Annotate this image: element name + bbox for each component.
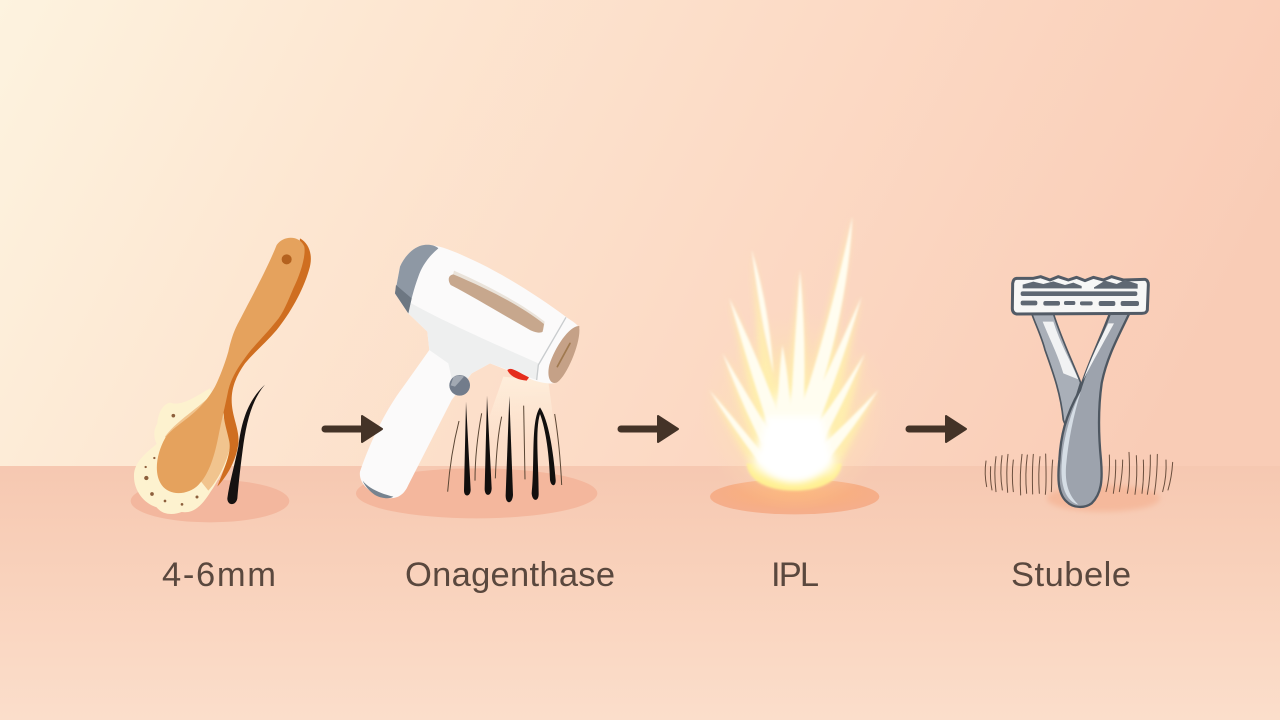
white rays xyxy=(709,217,878,467)
yellow rays xyxy=(709,217,878,480)
brush back tint xyxy=(165,387,232,491)
skin shadow xyxy=(356,468,597,518)
glow halo xyxy=(698,310,892,510)
red indicator xyxy=(507,369,529,381)
grip highlights xyxy=(1061,392,1081,505)
label: 4-6mm: 4-6mm xyxy=(162,556,276,594)
stubble xyxy=(985,452,1173,495)
body shading xyxy=(408,302,538,393)
handle right arm and grip xyxy=(1058,313,1129,507)
handle and bowl xyxy=(157,238,305,493)
front ring xyxy=(537,317,566,380)
foam dots xyxy=(144,414,228,506)
label: Onagenthase: Onagenthase xyxy=(405,556,615,594)
handle dark edge xyxy=(217,238,311,487)
base bowl xyxy=(747,463,842,491)
arrow 3 xyxy=(909,416,966,442)
grip cap xyxy=(363,481,393,498)
skin pool xyxy=(710,479,879,514)
razor blades xyxy=(1021,280,1139,306)
white center xyxy=(757,417,832,482)
hair xyxy=(227,385,265,504)
arrow 1 xyxy=(325,416,382,442)
foam xyxy=(134,388,233,514)
rear cap xyxy=(395,245,438,313)
hairs xyxy=(464,396,556,502)
lens face xyxy=(548,326,579,383)
step 3: IPL light burst xyxy=(698,217,892,514)
step 2: IPL device over hairs xyxy=(356,245,597,518)
arrow 2 xyxy=(621,416,678,442)
device body xyxy=(360,245,579,498)
skin shadow xyxy=(1047,485,1160,512)
fan of white light xyxy=(753,397,835,480)
step 1: exfoliating brush on hair xyxy=(131,238,311,522)
step 4: razor on stubble xyxy=(985,277,1173,512)
button xyxy=(449,375,470,396)
handle hole xyxy=(282,254,292,264)
skin shadow xyxy=(131,480,289,522)
handle left arm xyxy=(1032,313,1081,428)
window xyxy=(452,271,545,330)
light beam xyxy=(480,377,557,443)
thin hairs xyxy=(448,406,562,492)
label: Stubele: Stubele xyxy=(1011,556,1131,594)
label: IPL: IPL xyxy=(771,556,819,594)
skin surface xyxy=(0,466,1280,720)
razor head xyxy=(1012,277,1148,314)
